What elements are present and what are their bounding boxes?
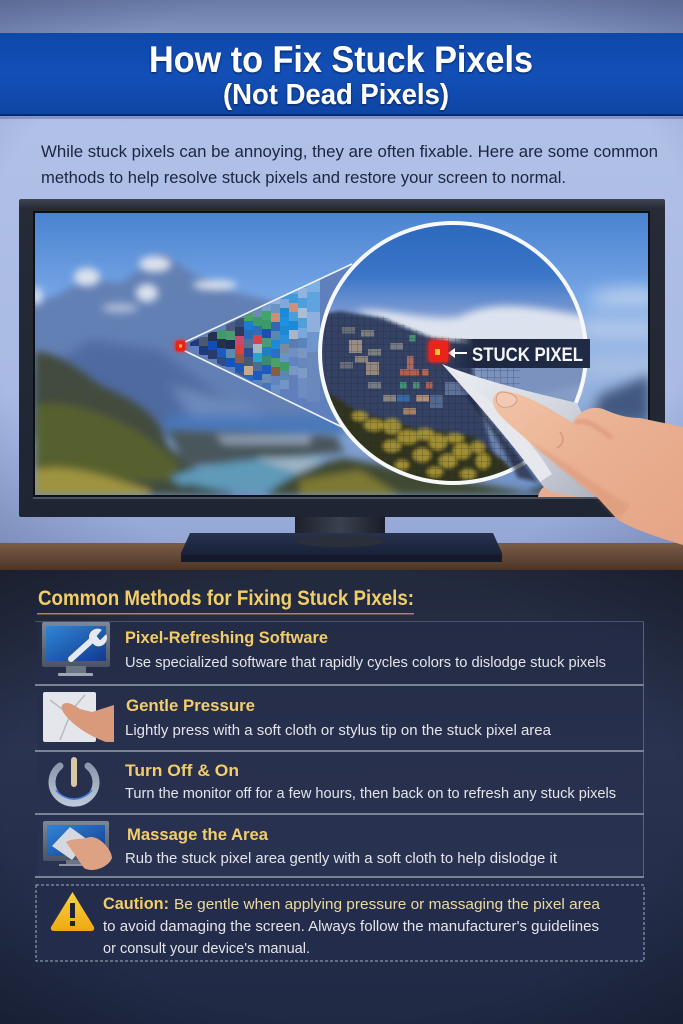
method 2: gentle pressure (43, 692, 552, 742)
zoom cone (174, 260, 353, 430)
hand with cloth (442, 364, 683, 545)
title banner (0, 33, 683, 119)
section heading: Common Methods for Fixing Stuck Pixels: (38, 587, 414, 610)
monitor (19, 199, 683, 961)
fingernail (496, 392, 517, 407)
method title: Pixel-Refreshing Software (125, 629, 328, 647)
screen landscape (25, 213, 660, 495)
mountain (25, 253, 345, 440)
method 1: pixel-refreshing software (42, 622, 606, 676)
method description: Lightly press with a soft cloth or stylus tip on the stuck pixel area (125, 723, 552, 739)
methods panel (35, 621, 644, 878)
method title: Gentle Pressure (126, 697, 255, 715)
magnifier (320, 223, 590, 490)
method description: Rub the stuck pixel area gently with a soft cloth to help dislodge it (125, 851, 557, 867)
icon: power symbol (52, 757, 96, 803)
caution text: to avoid damaging the screen. Always follow the manufacturer's guidelines (103, 918, 599, 935)
thumb (538, 483, 595, 497)
title: How to Fix Stuck Pixels (149, 39, 533, 80)
method description: Use specialized software that rapidly cycles colors to dislodge stuck pixels (125, 655, 606, 671)
icon: warning triangle (51, 892, 94, 931)
cloth (442, 364, 600, 497)
arrow (448, 348, 467, 358)
shadow on screen (442, 366, 538, 482)
intro text: methods to help resolve stuck pixels and restore your screen to normal. (41, 168, 566, 187)
caution text (103, 895, 601, 957)
magnified pixel cells (340, 327, 471, 414)
subtitle: (Not Dead Pixels) (223, 79, 449, 111)
stuck pixel label (448, 339, 590, 368)
method 3: turn off and on (52, 757, 616, 803)
monitor stand (181, 514, 502, 562)
magnified stuck pixel (428, 340, 449, 362)
intro text (41, 142, 658, 187)
method description: Turn the monitor off for a few hours, then back on to refresh any stuck pixels (125, 786, 616, 802)
caution text: Caution: (103, 895, 169, 913)
caution box (36, 885, 644, 961)
method title: Turn Off & On (125, 762, 239, 780)
method title: Massage the Area (127, 826, 269, 844)
icon: monitor with cloth and hand (43, 821, 112, 870)
label text: STUCK PIXEL (472, 344, 583, 366)
page background: top (0, 0, 683, 560)
stuck pixel marker (174, 340, 186, 352)
wooden shelf (0, 543, 683, 570)
forest (328, 391, 512, 481)
icon: monitor with wrench (42, 622, 110, 676)
caution text: or consult your device's manual. (103, 940, 310, 957)
method 4: massage the area (43, 821, 557, 870)
icon: finger pressing cloth (43, 692, 114, 742)
page background: bottom dark section (0, 568, 683, 1024)
hand (493, 391, 683, 545)
intro text: While stuck pixels can be annoying, they are often fixable. Here are some common (41, 142, 658, 161)
caution text: Be gentle when applying pressure or massaging the pixel area (174, 896, 601, 913)
